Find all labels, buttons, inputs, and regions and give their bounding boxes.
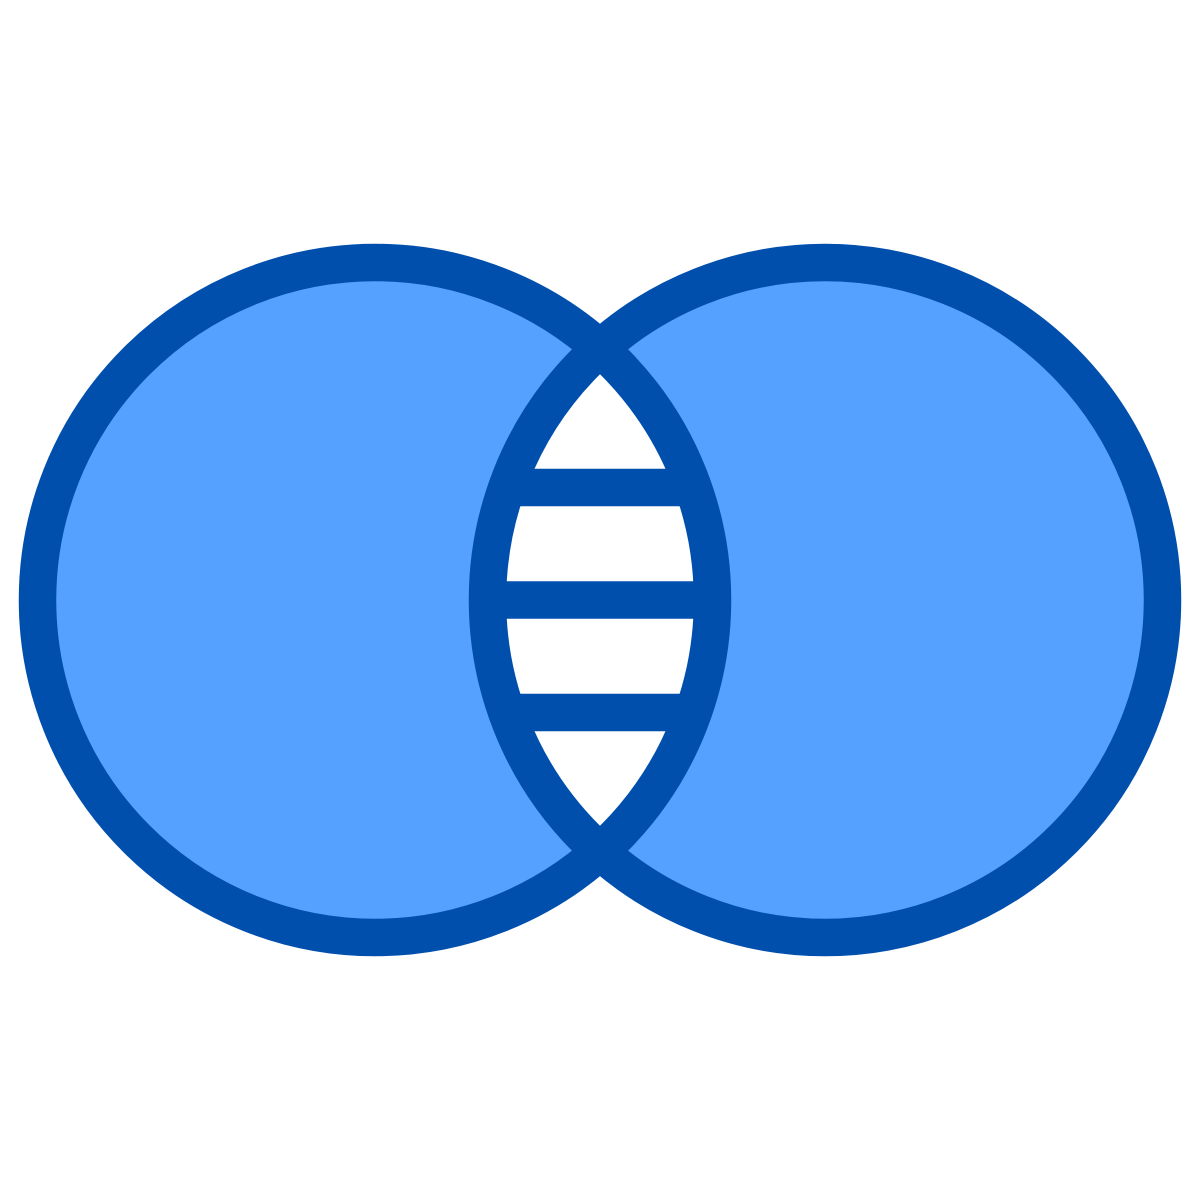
right circle bbox=[488, 262, 1162, 938]
icon: venn diagram bbox=[18, 244, 1182, 956]
left circle bbox=[38, 262, 712, 938]
overlap region bbox=[487, 348, 713, 852]
overlap stripes bbox=[506, 468, 694, 732]
right circle outline bbox=[488, 262, 1162, 938]
left circle outline bbox=[38, 262, 712, 938]
